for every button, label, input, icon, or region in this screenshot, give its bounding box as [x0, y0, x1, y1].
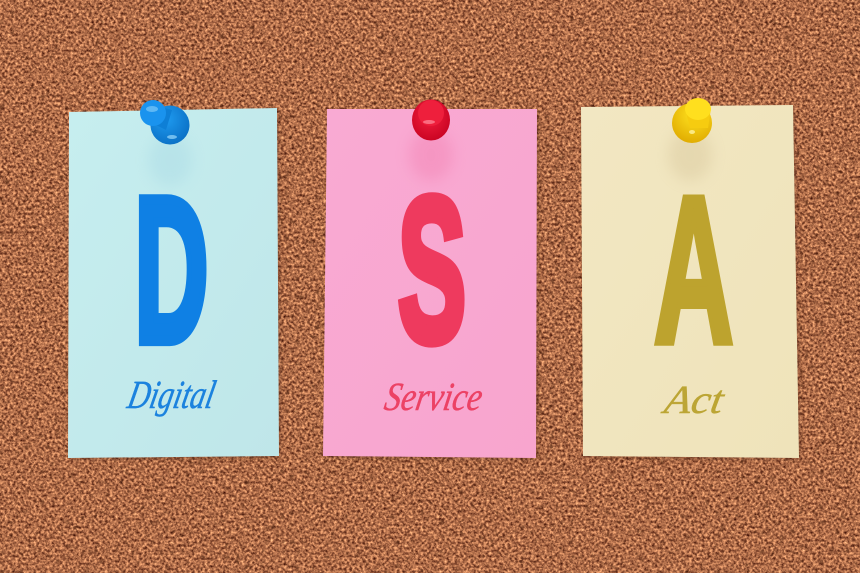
letter A: A: [654, 154, 733, 387]
panel: yellow card: [581, 98, 801, 460]
word: Act: Act: [658, 377, 728, 422]
letter S: S: [398, 156, 466, 385]
panel: blue card: [68, 100, 281, 460]
word: Digital: Digital: [123, 372, 220, 417]
letter D: D: [135, 156, 208, 385]
panel: pink card: [323, 100, 539, 460]
word: Service: Service: [381, 374, 486, 419]
icon: red push pin: [412, 100, 450, 140]
icon: yellow push pin: [672, 98, 712, 143]
icon: blue push pin: [140, 100, 190, 144]
